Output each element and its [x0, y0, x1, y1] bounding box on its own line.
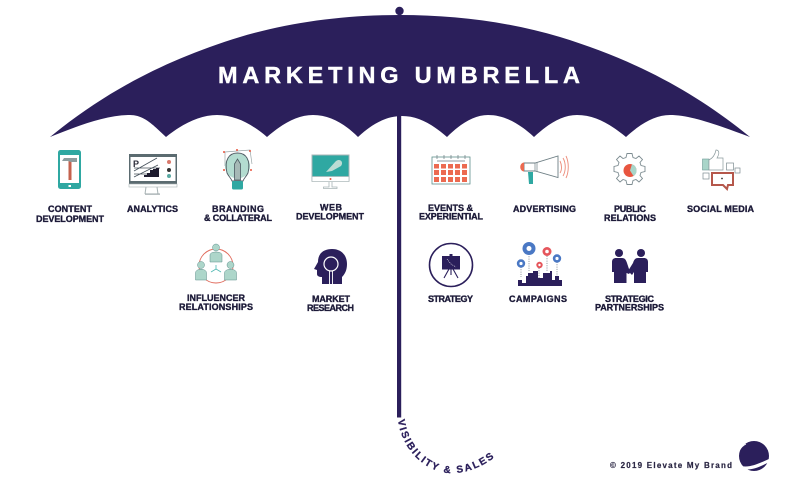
label: strategic partnerships: STRATEGIC: [605, 294, 654, 304]
copyright: © 2019 Elevate My Brand: [610, 461, 732, 470]
label: public relations: RELATIONS: [604, 213, 656, 223]
umbrella: [50, 7, 750, 418]
icon: social media: [702, 150, 740, 189]
label: analytics: ANALYTICS: [127, 204, 178, 214]
label: market research: MARKET: [312, 294, 350, 304]
label: strategy: STRATEGY: [428, 294, 473, 304]
icon: web monitor: [312, 154, 350, 188]
icon: public relations gear: [614, 154, 645, 184]
icon: analytics monitor: P: [133, 159, 139, 169]
label: market research: RESEARCH: [307, 303, 354, 313]
label: web development: [296, 202, 364, 222]
icon: advertising megaphone: [520, 156, 568, 184]
label: events and experiential: EXPERIENTIAL: [419, 212, 484, 222]
label: events and experiential: [419, 203, 484, 222]
label: public relations: [604, 204, 656, 223]
curved text: visibility and sales: VISIBILITY & SALES: [398, 418, 494, 474]
umbrella pole: [397, 110, 401, 418]
label: events and experiential: EVENTS &: [428, 203, 474, 213]
icon: strategy board: [430, 244, 472, 286]
label: strategic partnerships: PARTNERSHIPS: [595, 302, 664, 312]
umbrella canopy: [50, 15, 750, 137]
icon: campaigns city and bubbles: [517, 242, 562, 286]
label: market research: [307, 294, 354, 313]
icon: market research head: [314, 249, 347, 284]
label: advertising: ADVERTISING: [513, 204, 576, 214]
icon: branding light bulb: [223, 149, 252, 190]
logo: [737, 441, 771, 471]
label: content development: CONTENT: [48, 204, 92, 214]
label: branding and collateral: BRANDING: [212, 204, 264, 214]
label: branding and collateral: & COLLATERAL: [204, 213, 272, 223]
label: influencer relationships: [179, 293, 253, 312]
label: social media: SOCIAL MEDIA: [687, 204, 754, 214]
label: campaigns: CAMPAIGNS: [509, 294, 567, 304]
icon: strategic partnerships handshake: [612, 249, 648, 283]
label: public relations: PUBLIC: [614, 204, 646, 214]
label: web development: WEB: [320, 202, 342, 212]
icon: events calendar: [432, 155, 470, 184]
label: influencer relationships: INFLUENCER: [187, 293, 246, 303]
icon: influencer relationships: [196, 244, 236, 283]
label: content development: [36, 204, 104, 224]
icon: analytics monitor: [129, 154, 177, 195]
label: strategic partnerships: [595, 294, 664, 312]
title: MARKETING UMBRELLA: [218, 62, 580, 88]
label: branding and collateral: [204, 204, 272, 223]
label: content development: DEVELOPMENT: [36, 214, 104, 224]
umbrella knob: [395, 7, 404, 15]
label: influencer relationships: RELATIONSHIPS: [179, 302, 253, 312]
label: web development: DEVELOPMENT: [296, 212, 364, 222]
icon: phone with hammer: [58, 150, 81, 189]
